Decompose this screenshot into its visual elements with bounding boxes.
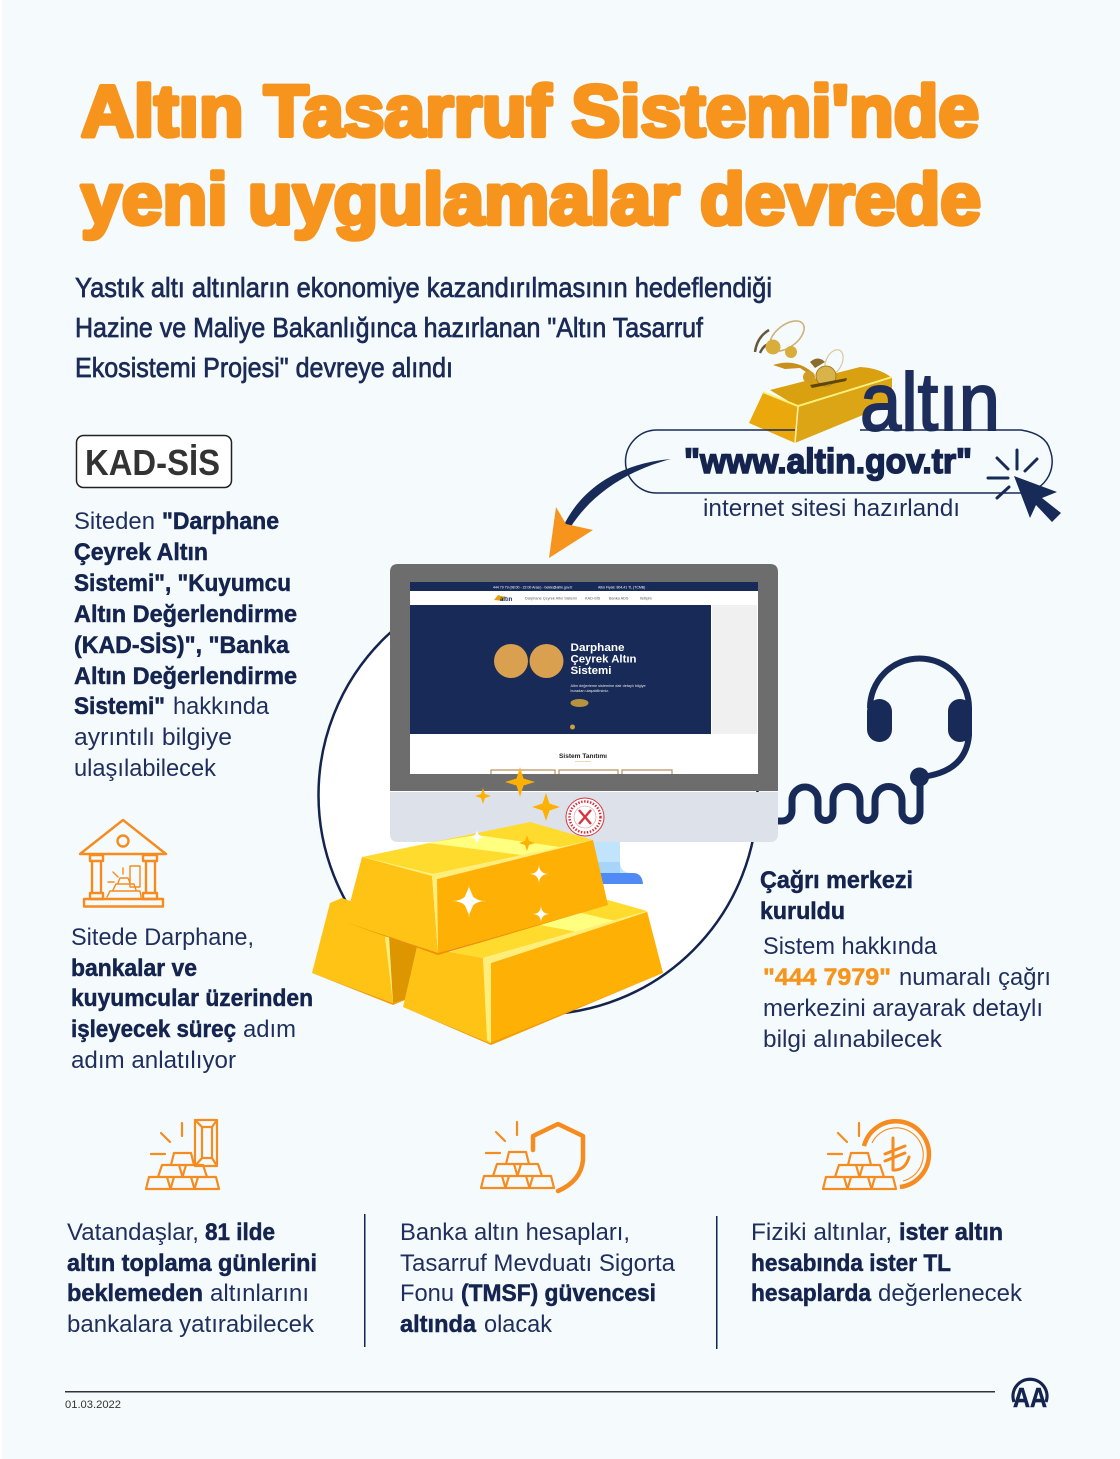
call center description: Sistem hakkında <box>763 933 938 960</box>
panel: citizens <box>67 1120 317 1338</box>
citizens description: beklemeden <box>67 1280 203 1307</box>
KAD-SİS description: hakkında <box>173 693 270 720</box>
bank accounts description: Tasarruf Mevduatı Sigorta <box>400 1250 676 1277</box>
panel: KAD-SİS <box>74 436 297 782</box>
citizens description: Vatandaşlar, <box>67 1219 199 1246</box>
mint description: adım <box>243 1016 296 1043</box>
subtitle text block: Hazine ve Maliye Bakanlığınca hazırlanan "Altın Tasarruf <box>75 312 703 343</box>
mint description: adım anlatılıyor <box>71 1047 236 1074</box>
site logo: altın <box>500 597 513 603</box>
orange sparkles <box>475 767 560 851</box>
coins <box>494 644 564 678</box>
mint description: Sitede Darphane, <box>71 924 254 951</box>
bank accounts description <box>400 1219 676 1338</box>
title <box>81 72 981 240</box>
illustration: circle behind the monitor <box>318 576 758 1014</box>
mint description: bankalar ve <box>71 955 197 982</box>
call center description: merkezini arayarak detaylı <box>763 995 1043 1022</box>
website screenshot <box>410 582 758 774</box>
call center heading <box>760 867 913 925</box>
bank accounts description: olacak <box>484 1311 553 1338</box>
white sparkles <box>452 831 550 923</box>
KAD-SİS description: Çeyrek Altın <box>74 539 208 566</box>
KAD-SİS description: "Darphane <box>162 508 279 535</box>
physical gold description: Fiziki altınlar, <box>751 1219 892 1246</box>
subtitle text block: Yastık altı altınların ekonomiye kazandırılmasının hedeflendiği <box>75 272 772 303</box>
title: yeni uygulamalar devrede <box>81 160 981 240</box>
logo wordmark: altın <box>860 357 1000 448</box>
icon: click cursor <box>988 450 1061 522</box>
logo: altın with gold bar <box>749 315 1000 448</box>
icon: gold pile with bar <box>146 1120 219 1189</box>
citizens description: altınlarını <box>210 1280 309 1307</box>
KAD-SİS description: Siteden <box>74 508 155 535</box>
logo: AA: AA <box>1013 1382 1047 1413</box>
bank accounts description: altında <box>400 1311 477 1338</box>
mint description: kuyumcular üzerinden <box>71 985 313 1012</box>
icon: gold pile with shield <box>481 1122 583 1191</box>
website screenshot: Altın Fiyatı: 804,41 TL (TCMB) <box>598 586 645 590</box>
bank accounts description: (TMSF) güvencesi <box>461 1280 656 1307</box>
KAD-SİS description: Altın Değerlendirme <box>74 601 297 628</box>
back left bar <box>312 898 417 1005</box>
bottom right bar <box>403 900 663 1045</box>
call center description <box>763 933 1051 1053</box>
subtitle text block <box>75 272 772 383</box>
citizens description: bankalara yatırabilecek <box>67 1311 315 1338</box>
bank accounts description: Banka altın hesapları, <box>400 1219 630 1246</box>
citizens description: 81 ilde <box>205 1219 275 1246</box>
panel: bank accounts <box>400 1122 676 1338</box>
citizens description <box>67 1219 317 1338</box>
website screenshot: 444 79 79 (08:00 - 22:00 Arası) · bekle@altin.gov.tr <box>493 586 573 590</box>
KAD-SİS description: (KAD-SİS)", "Banka <box>74 632 290 659</box>
KAD-SİS description: Altın Değerlendirme <box>74 663 297 690</box>
subtitle text block: Ekosistemi Projesi" devreye alındı <box>75 352 453 383</box>
call center heading: kuruldu <box>760 898 845 925</box>
call center description: "444 7979" <box>763 964 891 991</box>
KAD-SİS description: Sistemi" <box>74 693 165 720</box>
website screenshot: Darphane Çeyrek Altın Sistemi <box>525 596 577 600</box>
hero text: Çeyrek Altın <box>570 654 637 666</box>
gold bar <box>749 367 892 443</box>
hero button <box>570 699 588 707</box>
call center heading: Çağrı merkezi <box>760 867 913 894</box>
arrow: from website to monitor <box>549 459 671 558</box>
KAD-SİS description: ulaşılabilecek <box>74 755 217 782</box>
illustration: monitor <box>390 564 778 884</box>
citizens description: altın toplama günlerini <box>67 1250 317 1277</box>
KAD-SİS badge: KAD-SİS <box>85 442 220 483</box>
physical gold description: değerlenecek <box>878 1280 1023 1307</box>
physical gold description <box>751 1219 1023 1307</box>
hero text: buradan ulaşabilirsiniz. <box>570 689 609 693</box>
physical gold description: ister altın <box>899 1219 1003 1246</box>
physical gold description: hesabında ister TL <box>751 1250 951 1277</box>
mint description: işleyecek süreç <box>71 1016 236 1043</box>
monitor stand <box>592 842 643 884</box>
hero text: Darphane <box>570 642 624 654</box>
icon: mint building <box>80 820 166 906</box>
call center description: bilgi alınabilecek <box>763 1026 943 1053</box>
coins and jewellery <box>755 315 847 388</box>
url text: "www.altin.gov.tr" <box>684 442 972 481</box>
seal: ministry emblem <box>566 798 604 836</box>
headset icon <box>778 658 972 821</box>
title: Altın Tasarruf Sistemi'nde <box>81 72 979 152</box>
website screenshot: KAD-SİS <box>585 596 601 600</box>
bank accounts description: Fonu <box>400 1280 454 1307</box>
call center description: numaralı çağrı <box>899 964 1051 991</box>
panel: call center <box>760 867 1051 1053</box>
hero text: Altın değerleme sistemine dair detaylı bilgiye <box>570 684 646 688</box>
icon: gold pile with lira coin <box>823 1121 929 1189</box>
physical gold description: hesaplarda <box>751 1280 872 1307</box>
panel: mint process <box>71 820 313 1074</box>
mint description <box>71 924 313 1074</box>
hero text <box>570 642 646 693</box>
top bar <box>345 822 608 955</box>
KAD-SİS description: Sistemi", "Kuyumcu <box>74 570 291 597</box>
monitor body <box>390 564 778 791</box>
illustration: gold bars <box>312 767 663 1045</box>
KAD-SİS description: ayrıntılı bilgiye <box>74 724 232 751</box>
KAD-SİS description <box>74 508 297 782</box>
monitor base panel <box>390 792 778 842</box>
site logo <box>494 595 513 603</box>
website screenshot: İletişim <box>640 596 652 600</box>
section heading: Sistem Tanıtımı <box>559 753 607 760</box>
website screenshot: Banka ADS <box>609 596 629 600</box>
caption: website prepared: internet sitesi hazırlandı <box>703 495 960 522</box>
website url pill <box>626 430 1052 493</box>
panel: physical gold <box>751 1121 1023 1307</box>
hero text: Sistemi <box>570 665 612 677</box>
date: 01.03.2022 <box>65 1399 121 1411</box>
